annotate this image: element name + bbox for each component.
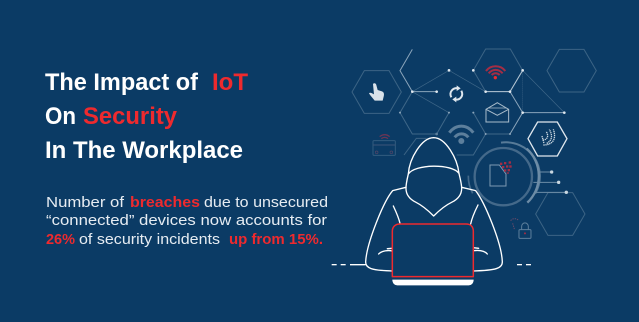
icon: file: [490, 165, 506, 186]
icon: lock: [511, 219, 531, 238]
body text: “connected” devices now accounts for: [46, 213, 327, 229]
laptop base: [392, 280, 474, 285]
data rings: [468, 142, 540, 205]
title: On: [45, 103, 76, 130]
hooded figure: [366, 138, 502, 271]
dashes: [332, 263, 531, 267]
hacker illustration group: [332, 138, 585, 285]
body text: Number of: [46, 195, 125, 211]
body text: 26%: [46, 232, 75, 248]
laptop screen: [392, 224, 473, 277]
body text: [46, 195, 328, 248]
body text: up from 15%.: [229, 232, 323, 248]
network nodes: [399, 69, 566, 135]
network lines: [400, 49, 564, 155]
icon: red wifi: [486, 66, 505, 79]
icon: card with wifi: [373, 135, 395, 155]
body text: breaches: [130, 195, 200, 211]
icon: red data squares: [500, 161, 512, 174]
icon: sync arrows: [450, 85, 462, 102]
title: [45, 69, 248, 164]
body text: of security incidents: [79, 232, 220, 248]
title: IoT: [212, 69, 248, 96]
icon: fingerprint hexagon: [528, 122, 567, 156]
icon: envelope: [486, 103, 509, 122]
network graphic: [352, 49, 596, 156]
title: Security: [83, 103, 178, 130]
bottom right hexagon: [536, 193, 585, 235]
connector lines: [533, 172, 566, 192]
icon: hand pointer: [369, 83, 384, 101]
icon: wifi: [449, 126, 473, 144]
title: The Impact of: [45, 69, 199, 96]
hexagon outlines: [352, 49, 596, 155]
body text: due to unsecured: [204, 195, 328, 211]
title: In The Workplace: [45, 137, 243, 164]
